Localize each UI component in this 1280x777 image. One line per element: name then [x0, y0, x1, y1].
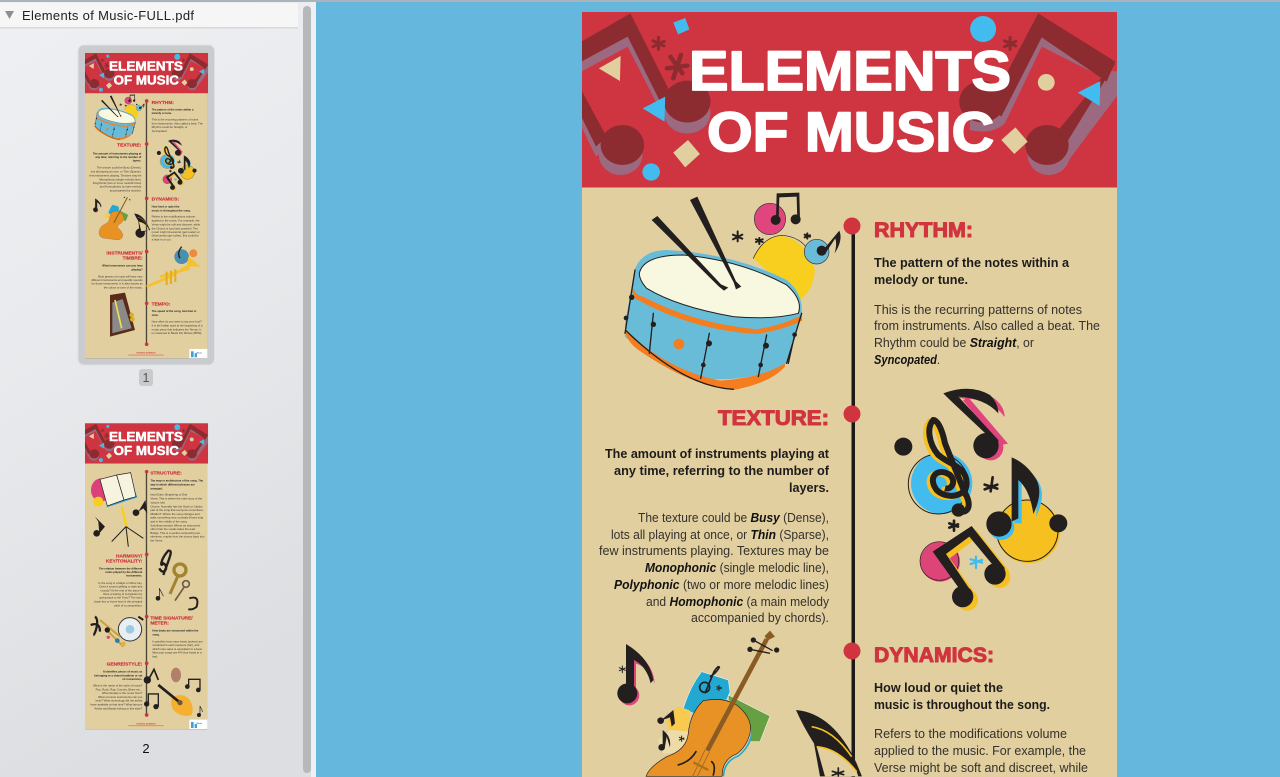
texture body text: lots all playing at once, or Thin (Sparse),: [611, 527, 829, 542]
thumbnail 1 text: How loud or quiet the: [152, 204, 180, 208]
page 1 selection frame: [78, 45, 214, 365]
thumbnail 1 text: How often do you want to tap your foot?: [152, 320, 202, 324]
dynamics body text: Verse might be soft and discreet, while: [874, 760, 1088, 775]
thumbnail 2 icon: clef and keys: [156, 551, 197, 609]
thumbnail 2 text: What common instruments can you: [98, 695, 143, 699]
thumbnail 2 text: Is the song in a Major or Minor key.: [98, 581, 143, 585]
thumbnail 2 text: Most pop songs are 4/4 (four beats in a: [152, 651, 202, 655]
thumbnail 1 artwork: [85, 53, 209, 240]
thumbnail 1 icon: metronome: [110, 293, 135, 337]
thumbnail 2 text: HARMONY/: [116, 553, 143, 559]
texture body text: few instruments playing. Textures may be: [599, 543, 829, 558]
thumbnail 2 text: song.: [152, 633, 160, 636]
section: rhythm: [874, 219, 1100, 367]
thumbnail 1 text: any time, referring to the number of: [95, 155, 141, 159]
thumbnail 2 title: ELEMENTS: [109, 429, 183, 444]
thumbnail 2 text: contained in each measure (bar), and: [152, 643, 200, 647]
heading: texture: TEXTURE:: [718, 407, 829, 430]
thumbnail 2 text: The relation between the different: [99, 566, 142, 570]
thumbnail 1 text: This is the recurring patterns of notes: [152, 118, 199, 122]
thumbnail 1 text: The pattern of the notes within a: [152, 107, 194, 111]
thumbnail 1 text: the colour or tone of the music.: [104, 285, 143, 289]
poster: main page: [581, 12, 1122, 777]
thumbnail 2 footer: THE MUSIC NOTEBOOK: [136, 723, 156, 725]
illustration: violin with notes: [617, 631, 862, 776]
thumbnail 2 text: METER:: [150, 621, 169, 627]
texture body text: Polyphonic (two or more melodic lines): [614, 577, 829, 592]
thumbnail 2 text: The map or architecture of the song. The: [150, 479, 204, 483]
thumbnail 1 text: lots all playing at once, or Thin (Sparse),: [91, 170, 142, 174]
rhythm body text: This is the recurring patterns of notes: [874, 302, 1082, 317]
dynamics definition: music is throughout the song.: [874, 697, 1050, 712]
thumbnail 1 text: music is throughout the song.: [152, 208, 191, 212]
thumbnail 2 text: Bridge: This is a section connecting two: [150, 531, 200, 535]
thumbnail 1 text: playing?: [131, 267, 143, 271]
sidebar file title row: Elements of Music-FULL.pdf: [22, 8, 194, 23]
thumbnail 2 text: going back to the Tonic? The tonic: [99, 596, 143, 600]
thumbnail 1 text: for those instruments. It is also known as: [92, 282, 143, 286]
texture body text: accompanied by chords).: [691, 610, 829, 625]
thumbnail 2 text: It identifies pieces of music as: [103, 670, 143, 674]
thumbnail 2 text: What is the name of the style of music?: [93, 684, 143, 688]
thumbnail 1 text: Most genres of music will have very: [98, 274, 143, 278]
thumbnail 2 title: OF MUSIC: [114, 443, 180, 458]
rhythm definition: melody or tune.: [874, 272, 968, 287]
thumbnail 2 text: other than the vocals takes the lead.: [150, 527, 196, 531]
thumbnail 2 text: arranged.: [150, 486, 163, 490]
rhythm definition: The pattern of the notes within a: [874, 255, 1070, 270]
thumbnail 1 text: accompanied by chords).: [110, 188, 142, 192]
thumbnail 2 text: Chorus: Normally has the Hook or Catchy: [150, 504, 203, 508]
thumbnail 2 text: Middle 8: Where the song changes and: [150, 512, 200, 516]
header title: ELEMENTS: [689, 39, 1011, 102]
thumbnail 2 text: STRUCTURE:: [150, 471, 182, 477]
thumbnail 2 icon: clock with notes: [91, 617, 143, 647]
thumbnail 2 text: of conventions.: [122, 677, 143, 681]
poster header banner: [581, 12, 1122, 188]
timeline dot: dynamics: [844, 642, 860, 660]
thumbnail 1 text: music might Crescendo (get louder) or: [152, 230, 200, 234]
thumbnail 2 icon: guitar with notes: [144, 668, 203, 717]
thumbnail 1 text: The amount of instruments playing at: [93, 151, 141, 155]
thumbnail 2 text: elements, maybe from the chorus back into: [150, 535, 205, 539]
thumbnail 1 timeline: [145, 99, 148, 346]
texture body text: [599, 510, 830, 625]
texture definition: [605, 446, 830, 495]
thumbnail 2 text: Artists and Bands belong to this style?: [94, 706, 143, 710]
thumbnail 1 text: music piece that indicates the Tempo. It: [152, 327, 201, 331]
thumbnail 1 text: applied to the music. For example, the: [152, 218, 200, 222]
thumbnail 2 text: pitch of a composition.: [114, 603, 143, 607]
thumbnail 2 text: Does it sound uplifting or dark and: [99, 585, 143, 589]
thumbnail 1 text: and Homophonic (a main melody: [100, 185, 142, 189]
thumbnail 2 text: (main key or home key) is the principal: [94, 600, 143, 604]
timeline dot: rhythm: [844, 218, 860, 234]
poster beige background: [582, 187, 1117, 777]
thumbnail 1 text: few instruments playing. Textures may be: [89, 174, 142, 178]
thumbnail 2 footer: Music: [197, 723, 203, 725]
thumbnail 2 icon: music stand: [91, 473, 147, 547]
thumbnail 2 text: Solo/Instrumental: Where an instrument: [150, 523, 200, 527]
thumbnail 2 text: TIME SIGNATURE/: [150, 615, 193, 621]
dynamics definition: How loud or quiet the: [874, 680, 1003, 695]
thumbnail: page 1: [85, 53, 209, 358]
thumbnail 1 footer: Music: [197, 352, 203, 354]
thumbnail 2 text: there a feeling of completion by: [103, 592, 143, 596]
section: texture: [599, 407, 830, 625]
texture body text: Monophonic (single melodic line),: [645, 560, 829, 575]
thumbnail 2 timeline: [145, 470, 148, 717]
texture definition: The amount of instruments playing at: [605, 446, 830, 461]
thumbnail 2 text: hear? What technology did the artists: [96, 699, 143, 703]
dynamics body text: applied to the music. For example, the: [874, 743, 1086, 758]
thumbnail 2 text: adds something new, normally 8 bars long: [150, 516, 204, 520]
thumbnail 1 text: Rhythm could be Straight, or: [152, 125, 188, 129]
thumbnail 1 text: Syncopated.: [152, 129, 168, 133]
thumbnail 1 text: slow.: [152, 313, 159, 317]
thumbnail 1 text: RHYTHM:: [152, 100, 174, 106]
timeline line: [852, 226, 855, 777]
thumbnail 1 text: INSTRUMENTS/: [106, 250, 143, 256]
thumbnail 1 text: TEMPO:: [152, 302, 171, 308]
scrollbar: [303, 6, 311, 773]
thumbnail 2 text: GENRE/STYLE:: [107, 662, 143, 668]
thumbnail 2 text: way in which different phrases are: [149, 482, 195, 486]
dynamics body text: Refers to the modifications volume: [874, 726, 1067, 741]
header title: [689, 39, 1011, 163]
thumbnail 1 text: Diminuendo (get softer), this could be: [152, 234, 199, 238]
rhythm body text: Rhythm could be Straight, or: [874, 335, 1035, 350]
thumbnail: page 2: [85, 423, 209, 729]
thumbnail 2 text: which note value is equivalent to a beat.: [152, 647, 203, 651]
thumbnail 2 text: moody? At the end of the piece is: [100, 588, 143, 592]
page number 1: [139, 369, 153, 386]
thumbnail 2 text: the Verse.: [150, 539, 163, 543]
thumbnail 1 footer: THE MUSIC NOTEBOOK: [136, 353, 156, 355]
thumbnail 1 text: melody or tune.: [152, 111, 172, 115]
thumbnail 2 text: bar).: [152, 655, 158, 659]
timeline dot: texture: [844, 406, 860, 422]
thumbnail 1 text: Verse might be soft and discreet, while: [152, 222, 200, 226]
thumbnail 1 text: The texture could be Busy (Dense),: [97, 166, 142, 170]
thumbnail 2 text: song is told.: [150, 500, 166, 504]
thumbnail 1 footer: [128, 349, 207, 358]
rhythm definition: [874, 255, 1070, 287]
thumbnail 1 text: The speed of the song, how fast or: [152, 309, 197, 313]
thumbnail 1 text: is measured in Beats Per Minute (BPM).: [152, 331, 202, 335]
thumbnail 1 text: a fade in or out.: [152, 238, 172, 242]
rhythm body text: from instruments. Also called a beat. The: [874, 318, 1100, 333]
thumbnail 2 text: have available at that time? What famous: [90, 703, 143, 707]
rhythm body text: [874, 302, 1100, 367]
section: dynamics: [874, 644, 1088, 775]
sidebar file title row: [0, 3, 298, 28]
texture definition: any time, referring to the number of: [614, 463, 830, 478]
thumbnail 2 text: Pop, Rock, Rap, Country, Blues etc...: [96, 687, 143, 691]
thumbnail 2 text: Intro/Outro: Beginning or End: [150, 493, 188, 497]
thumbnail 1 text: Monophonic (single melodic line),: [99, 177, 142, 181]
thumbnail 2 text: instruments.: [126, 574, 143, 578]
thumbnail 1 text: Polyphonic (two or more melodic lines): [93, 181, 141, 185]
thumbnail 2 text: Verse: This is where the main story of the: [150, 497, 203, 501]
page number 1: 1: [143, 371, 150, 385]
thumbnail 2 title: [109, 429, 183, 458]
thumbnail 2 text: KEY/TONALITY:: [106, 559, 143, 565]
heading: rhythm: RHYTHM:: [874, 219, 973, 242]
thumbnail 1 text: Refers to the modifications volume: [152, 214, 195, 218]
thumbnail 2 text: How beats are structured within the: [152, 629, 199, 633]
dynamics definition: [874, 680, 1050, 712]
thumbnail 1 text: DYNAMICS:: [152, 197, 179, 203]
thumbnail 1 text: different instruments and specific sounds: [91, 278, 143, 282]
dynamics body text: [874, 726, 1088, 775]
thumbnail 1 text: from instruments. Also called a beat. The: [152, 121, 203, 125]
thumbnail 1 title: ELEMENTS: [109, 58, 183, 73]
thumbnail 1 text: TEXTURE:: [117, 143, 142, 149]
thumbnail 2 text: [90, 471, 205, 710]
thumbnail 1 icon: trumpet: [147, 247, 201, 287]
thumbnail 1 text: layers.: [133, 159, 142, 163]
thumbnail 2 text: It specifies how many beats (pulses) are: [152, 639, 203, 643]
thumbnail 1 text: What instruments can you hear: [102, 264, 144, 268]
thumbnail 1 title: [109, 58, 183, 87]
thumbnail 1 text: It is the Italian word at the beginning of a: [152, 324, 203, 328]
thumbnail 2 text: and in the middle of the song.: [150, 519, 188, 523]
page number 2: 2: [142, 741, 150, 756]
thumbnail 1 text: TIMBRE:: [123, 256, 143, 262]
header title: OF MUSIC: [707, 100, 994, 163]
thumbnail 2 header: [85, 423, 209, 464]
thumbnail 1 text: [89, 100, 203, 335]
texture definition: layers.: [789, 480, 829, 495]
texture body text: and Homophonic (a main melody: [646, 594, 830, 609]
illustration: music notes cluster: [894, 389, 1067, 611]
thumbnail 2 text: notes played by the different: [105, 570, 142, 574]
rhythm body text: Syncopated.: [874, 352, 940, 367]
thumbnail 1 text: the Chorus is loud and powerful. The: [152, 226, 198, 230]
thumbnail 2 text: belonging to a shared tradition or set: [94, 673, 142, 677]
texture body text: The texture could be Busy (Dense),: [638, 510, 829, 525]
heading: dynamics: DYNAMICS:: [874, 644, 994, 667]
thumbnail 2 text: part of the song that everyone remembers.: [150, 508, 204, 512]
header decorative music notes: [581, 13, 1122, 181]
illustration: snare drum with notes: [624, 193, 841, 390]
thumbnail 2 footer: [128, 720, 207, 729]
thumbnail 2 text: What decade is the music from?: [102, 691, 143, 695]
thumbnail 1 title: OF MUSIC: [114, 72, 180, 87]
